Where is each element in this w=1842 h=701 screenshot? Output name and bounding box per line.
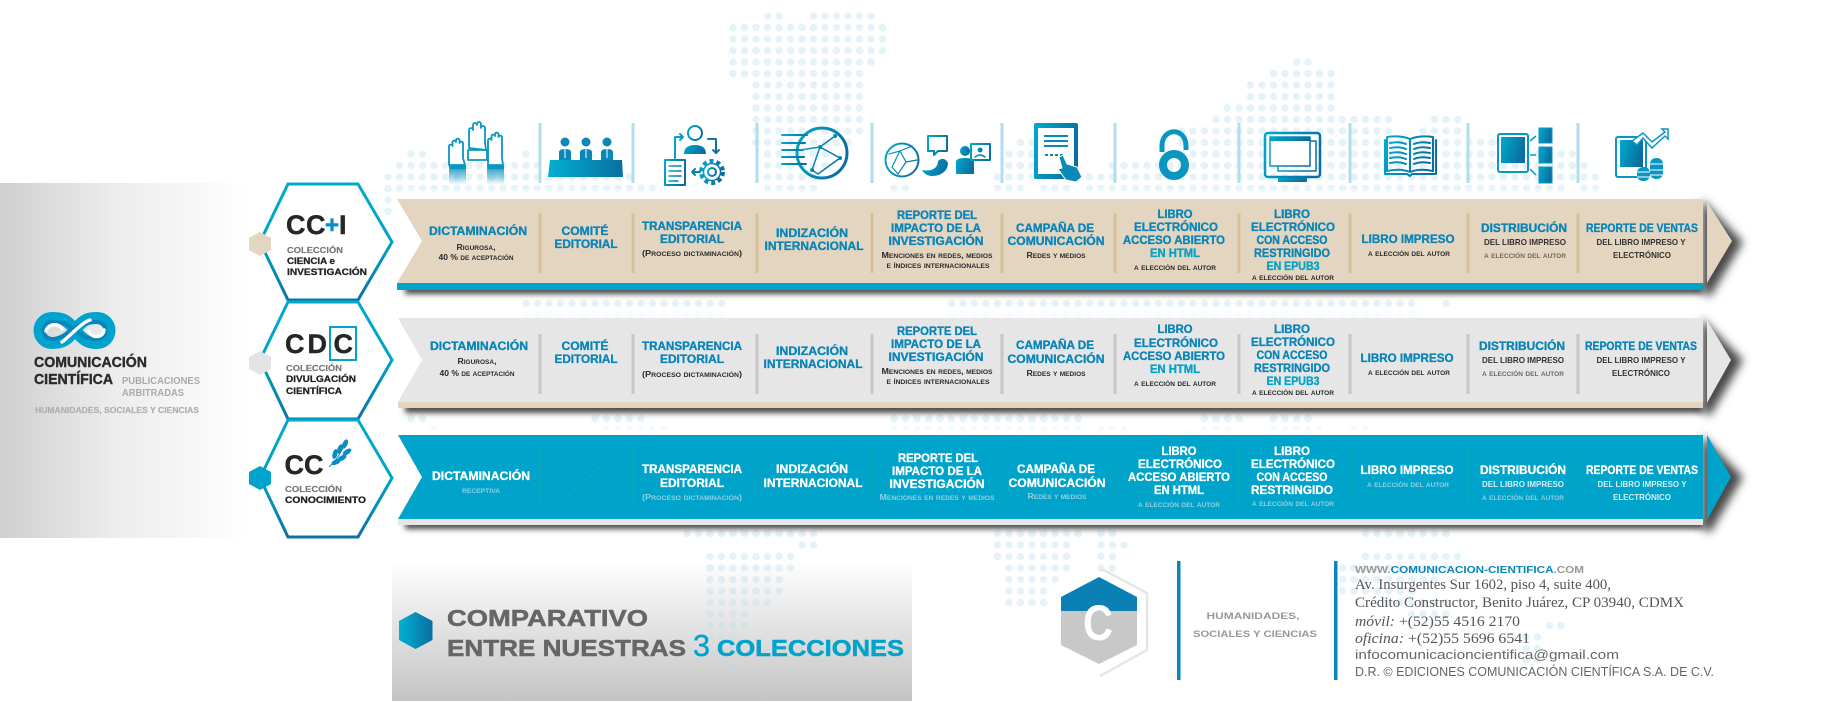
hexagon: CC+I: I [339, 210, 347, 240]
hexagon: CC conocimiento: CONOCIMIENTO [285, 495, 366, 505]
cell: comite editorial empty slash [567, 457, 610, 498]
cell: dictaminacion: DICTAMINACIÓN [430, 338, 528, 353]
title: comparativo entre nuestras 3 colecciones [447, 605, 904, 663]
cell: transparencia editorial: TRANSPARENCIA [642, 462, 742, 476]
row: CDC ribbon [398, 318, 1731, 408]
cell: reporte de ventas [1585, 339, 1697, 378]
cell: libro electronico restringido [1251, 444, 1335, 508]
cell: reporte del impacto: Menciones en redes, medios [882, 367, 992, 376]
cell: campana de comunicacion: Redes y medios [1028, 492, 1086, 501]
cell: libro impreso: LIBRO IMPRESO [1362, 232, 1454, 246]
cell: libro electronico restringido: RESTRINGIDO [1251, 483, 1333, 497]
icon column dividers [540, 123, 1578, 183]
cell: libro electronico html: ELECTRÓNICO [1134, 335, 1218, 350]
icon: tablet with pointer hand [1034, 123, 1082, 182]
cell: transparencia editorial: TRANSPARENCIA [642, 219, 742, 233]
cell: indizacion internacional: INDIZACIÓN [776, 225, 848, 240]
cell: reporte del impacto: REPORTE DEL [898, 451, 978, 465]
cell: libro electronico html: ELECTRÓNICO [1134, 219, 1218, 234]
cell: reporte del impacto: Menciones en redes, medios [882, 251, 992, 260]
text: brand name [34, 353, 200, 415]
cell: campana de comunicacion: CAMPAÑA DE [1016, 337, 1094, 352]
cell: libro electronico epub3: a elección del autor [1252, 273, 1335, 282]
cell: libro electronico restringido: LIBRO [1274, 444, 1310, 458]
cell: comite editorial [554, 338, 618, 366]
cell: transparencia editorial [642, 462, 742, 502]
cell: comite editorial: COMITÉ [562, 338, 608, 353]
cell: reporte de ventas: ELECTRÓNICO [1612, 367, 1670, 378]
icon: editorial committee table [548, 138, 623, 177]
cell: libro electronico html: ACCESO ABIERTO [1123, 233, 1225, 247]
title: comparativo entre nuestras 3 colecciones: 3 [693, 628, 710, 663]
panel: left grey logo band [0, 183, 250, 538]
cell: comite editorial: EDITORIAL [554, 237, 618, 251]
cell: distribucion: a elección del autor [1482, 493, 1565, 502]
icon: transparency workflow [665, 126, 723, 185]
hexagon: CDC: COLECCIÓN [286, 362, 342, 373]
cell: indizacion internacional: INTERNACIONAL [764, 357, 862, 371]
icon: wheat [329, 438, 353, 467]
text: contact block [1355, 564, 1714, 679]
cell: transparencia editorial: (Proceso dictaminación) [642, 370, 742, 379]
text: contact block: Av. Insurgentes Sur 1602, piso 4, suite 400, [1355, 577, 1611, 593]
icon: open printed book [1385, 136, 1436, 176]
hexagon: CDC: CDC [285, 329, 353, 359]
cell: campana de comunicacion: CAMPAÑA DE [1016, 220, 1094, 235]
cell: libro electronico html: LIBRO [1158, 207, 1192, 221]
cell: reporte del impacto [882, 208, 992, 270]
cell: distribucion: DEL LIBRO IMPRESO [1482, 355, 1564, 365]
cell: reporte de ventas: REPORTE DE VENTAS [1586, 221, 1698, 235]
cell: libro electronico epub3: ELECTRÓNICO [1251, 334, 1335, 349]
cell: indizacion internacional [764, 461, 862, 490]
cell: indizacion internacional: INTERNACIONAL [764, 239, 864, 253]
cell: reporte del impacto: IMPACTO DE LA [891, 337, 981, 351]
hexagon: CC+I: COLECCIÓN [287, 244, 343, 255]
hexagon: CC+I: CIENCIA e [287, 256, 335, 266]
cell: dictaminacion [430, 338, 528, 378]
cell: libro electronico html [1128, 444, 1230, 509]
cell: libro electronico epub3: CON ACCESO [1256, 348, 1328, 362]
cell: libro electronico html: ELECTRÓNICO [1138, 456, 1222, 471]
cell: indizacion internacional: INDIZACIÓN [776, 343, 848, 358]
cell: libro electronico html: a elección del autor [1134, 379, 1217, 388]
cell: campana de comunicacion: Redes y medios [1026, 369, 1086, 378]
cell: libro electronico epub3: RESTRINGIDO [1254, 246, 1330, 260]
cell: distribucion: a elección del autor [1484, 251, 1567, 260]
text: humanidades [1193, 611, 1317, 639]
icon: open access padlock [1162, 132, 1186, 176]
cell: reporte de ventas: ELECTRÓNICO [1613, 491, 1671, 502]
icon: sales report with book, arrow and coins [1616, 129, 1668, 181]
title: comparativo entre nuestras 3 colecciones: ENTRE NUESTRAS [447, 635, 686, 661]
text: contact block: oficina: +(52)55 5696 6541 [1355, 631, 1530, 647]
cell: libro electronico html: a elección del autor [1138, 500, 1221, 509]
cell: dictaminacion: DICTAMINACIÓN [432, 468, 530, 483]
cell: reporte de ventas: DEL LIBRO IMPRESO Y [1596, 355, 1686, 365]
cell: libro impreso: LIBRO IMPRESO [1360, 351, 1454, 365]
hexagon: CC+I: INVESTIGACIÓN [287, 266, 367, 277]
hexagon: CDC: DIVULGACIÓN [286, 373, 356, 384]
cell: libro electronico html [1123, 322, 1225, 388]
cell: reporte del impacto: REPORTE DEL [897, 324, 977, 338]
cell: libro electronico html: EN HTML [1150, 362, 1200, 376]
cell: dictaminacion: DICTAMINACIÓN [429, 223, 527, 238]
cell: distribucion [1481, 220, 1567, 260]
cell: distribucion [1479, 338, 1565, 378]
cell: libro electronico html: ACCESO ABIERTO [1128, 470, 1230, 484]
cell: distribucion: DISTRIBUCIÓN [1479, 338, 1565, 353]
cell: comite editorial: COMITÉ [562, 223, 608, 238]
cell: reporte del impacto [882, 324, 992, 386]
bar: divider two [1334, 561, 1338, 680]
hexagon: CC+I [249, 184, 392, 300]
hexagon: CC conocimiento [249, 420, 392, 537]
ribbon body tan [397, 199, 1732, 290]
cell: reporte del impacto: Menciones en redes y medios [880, 493, 994, 502]
text: contact block: infocomunicacioncientifica@gmail.com [1355, 647, 1619, 662]
cell: comite editorial: EDITORIAL [554, 352, 618, 366]
cell: reporte del impacto: IMPACTO DE LA [891, 221, 981, 235]
cell: transparencia editorial: (Proceso dictaminación) [642, 249, 742, 258]
cell: dictaminacion [429, 223, 527, 262]
cell: reporte del impacto [880, 451, 994, 502]
text: brand name: CIENTÍFICA [34, 371, 114, 388]
cell: transparencia editorial: EDITORIAL [660, 476, 724, 490]
hexagon: CC conocimiento: CC [284, 450, 324, 480]
text: contact block: D.R. © EDICIONES COMUNICACIÓN CIENTÍFICA S.A. DE C.V. [1355, 664, 1714, 679]
icon: infinity logo mark [40, 318, 110, 343]
panel: bottom grey title band [392, 560, 912, 701]
cell: reporte del impacto: INVESTIGACIÓN [888, 349, 984, 364]
logo: C hexagon [1061, 568, 1147, 676]
cell: reporte del impacto: e índices internacionales [886, 377, 990, 386]
ribbon body grey [398, 318, 1731, 408]
hexagon: CC+I: CC [286, 210, 326, 240]
cell: reporte de ventas [1586, 221, 1698, 260]
icon: book distribution [1498, 128, 1552, 183]
cell: dictaminacion: 40 % de aceptación [438, 253, 514, 262]
cell: indizacion internacional [764, 343, 862, 371]
icon: monitor with windows [1265, 133, 1320, 182]
cell: libro electronico html: ACCESO ABIERTO [1123, 349, 1225, 363]
cell: libro electronico html: EN HTML [1154, 483, 1204, 497]
cell: libro electronico html: LIBRO [1158, 322, 1192, 336]
row: CC ribbon [398, 435, 1731, 525]
cell: campana de comunicacion [1008, 337, 1104, 378]
title: comparativo entre nuestras 3 colecciones: COLECCIONES [717, 635, 904, 661]
cell: distribucion: DEL LIBRO IMPRESO [1484, 237, 1566, 247]
cell: libro electronico html: EN HTML [1150, 246, 1200, 260]
text: brand name: COMUNICACIÓN [34, 353, 147, 371]
cell: libro impreso: a elección del autor [1367, 480, 1450, 489]
cell: dictaminacion: Rigurosa, [456, 243, 496, 252]
cell: reporte del impacto: IMPACTO DE LA [892, 464, 982, 478]
bar: divider one [1177, 561, 1180, 680]
cell: reporte de ventas: DEL LIBRO IMPRESO Y [1598, 479, 1687, 489]
cell: transparencia editorial: (Proceso dictaminación) [642, 493, 742, 502]
cell: campana de comunicacion [1008, 461, 1106, 501]
hexagon: CC conocimiento: COLECCIÓN [285, 483, 342, 494]
cell: distribucion: DISTRIBUCIÓN [1480, 462, 1566, 477]
cell: libro electronico epub3: ELECTRÓNICO [1251, 219, 1335, 234]
ribbon body blue [398, 435, 1731, 525]
cell: transparencia editorial [642, 219, 742, 258]
cell: libro electronico epub3: EN EPUB3 [1266, 374, 1320, 388]
cell: libro impreso: LIBRO IMPRESO [1360, 463, 1454, 477]
group: left brand logo [34, 318, 200, 415]
cell: reporte de ventas: REPORTE DE VENTAS [1586, 463, 1698, 477]
cell: comite editorial [554, 223, 618, 251]
cell: libro impreso: a elección del autor [1368, 368, 1451, 377]
cell: dictaminacion [432, 468, 530, 495]
cell: libro electronico restringido: ELECTRÓNICO [1251, 456, 1335, 471]
cell: indizacion internacional [764, 225, 864, 253]
row: CC+I ribbon [397, 199, 1732, 290]
title: comparativo entre nuestras 3 colecciones: COMPARATIVO [447, 605, 648, 631]
icon: globe network with lines [782, 128, 847, 178]
cell: libro impreso [1362, 232, 1454, 258]
cell: libro electronico epub3: a elección del autor [1252, 388, 1335, 397]
text: contact block: móvil: +(52)55 4516 2170 [1355, 614, 1520, 630]
cell: distribucion: DISTRIBUCIÓN [1481, 220, 1567, 235]
hexagon: CC+I: + [325, 212, 339, 239]
icon: raised hands [449, 122, 504, 185]
cell: campana de comunicacion: COMUNICACIÓN [1008, 351, 1104, 366]
hexagon: CDC: CIENTÍFICA [286, 386, 343, 396]
cell: libro electronico restringido: CON ACCESO [1256, 470, 1328, 484]
text: contact block: Crédito Constructor, Benito Juárez, CP 03940, CDMX [1355, 595, 1685, 611]
text: contact block: WWW. COMUNICACION-CIENTIFICA .COM [1355, 564, 1584, 576]
cell: reporte de ventas: DEL LIBRO IMPRESO Y [1596, 237, 1686, 247]
text: brand name: ARBITRADAS [122, 388, 184, 399]
cell: distribucion: a elección del autor [1482, 369, 1565, 378]
cell: campana de comunicacion: Redes y medios [1026, 251, 1086, 260]
cell: libro electronico epub3: EN EPUB3 [1266, 259, 1320, 273]
cell: libro electronico html: a elección del autor [1134, 263, 1217, 272]
text: humanidades: HUMANIDADES, [1206, 611, 1300, 621]
cell: transparencia editorial: TRANSPARENCIA [642, 339, 742, 353]
cell: libro electronico epub3: CON ACCESO [1256, 233, 1328, 247]
cell: campana de comunicacion: COMUNICACIÓN [1008, 475, 1106, 490]
hexagon: CDC [249, 302, 392, 419]
cell: libro electronico epub3 [1251, 322, 1335, 397]
cell: libro impreso [1360, 351, 1454, 377]
cell: indizacion internacional: INTERNACIONAL [764, 476, 862, 490]
text: humanidades: SOCIALES Y CIENCIAS [1193, 629, 1317, 639]
text: brand name: PUBLICACIONES [122, 376, 200, 387]
cell: libro impreso: a elección del autor [1368, 249, 1451, 258]
cell: transparencia editorial: EDITORIAL [660, 232, 724, 246]
cell: libro electronico epub3 [1251, 207, 1335, 282]
cell: distribucion: DEL LIBRO IMPRESO [1482, 479, 1564, 489]
cell: libro electronico restringido: a elección del autor [1252, 499, 1335, 508]
cell: campana de comunicacion [1008, 220, 1104, 260]
cell: libro impreso [1360, 463, 1454, 489]
cell: reporte de ventas: REPORTE DE VENTAS [1585, 339, 1697, 353]
cell: distribucion [1480, 462, 1566, 502]
cell: reporte de ventas [1586, 463, 1698, 502]
cell: reporte del impacto: REPORTE DEL [897, 208, 977, 222]
icon: social impact globe, bird and person [886, 136, 990, 176]
text: brand name: HUMANIDADES, SOCIALES Y CIENCIAS [35, 406, 200, 415]
cell: dictaminacion: 40 % de aceptación [440, 369, 514, 378]
cell: indizacion internacional: INDIZACIÓN [776, 461, 848, 476]
cell: libro electronico epub3: LIBRO [1274, 322, 1310, 336]
cell: libro electronico epub3: RESTRINGIDO [1254, 361, 1330, 375]
background: dotted world map [388, 16, 1601, 672]
cell: reporte del impacto: INVESTIGACIÓN [890, 476, 984, 491]
cell: campana de comunicacion: COMUNICACIÓN [1008, 233, 1104, 248]
cell: libro electronico html [1123, 207, 1225, 272]
cell: dictaminacion: receptiva [462, 486, 501, 495]
cell: transparencia editorial [642, 339, 742, 379]
cell: dictaminacion: Rigurosa, [458, 357, 496, 366]
ribbon shadows and glow [398, 192, 1743, 533]
cell: reporte del impacto: INVESTIGACIÓN [888, 233, 984, 248]
cell: transparencia editorial: EDITORIAL [660, 352, 724, 366]
cell: libro electronico epub3: LIBRO [1274, 207, 1310, 221]
cell: reporte del impacto: e índices internacionales [886, 261, 990, 270]
cell: reporte de ventas: ELECTRÓNICO [1613, 249, 1671, 260]
cell: campana de comunicacion: CAMPAÑA DE [1017, 461, 1095, 476]
icon: bottom title hexagon [399, 612, 432, 649]
logo: C hexagon: C [1083, 595, 1113, 651]
cell: libro electronico html: LIBRO [1162, 444, 1196, 458]
